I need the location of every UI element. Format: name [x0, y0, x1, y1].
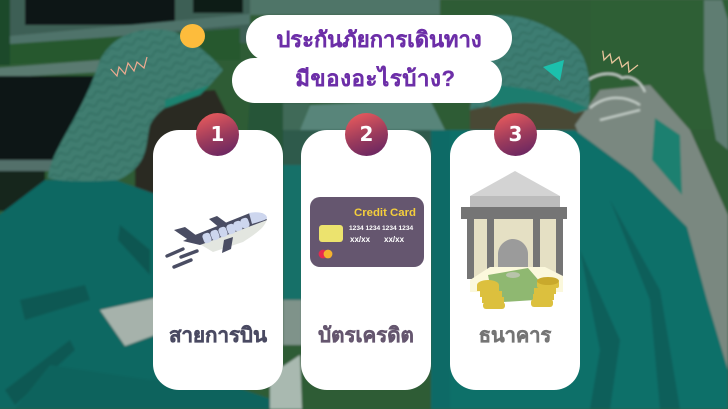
decoration: yellow dot — [180, 24, 205, 48]
title line 2: มีของอะไรบ้าง? — [295, 66, 456, 91]
card numbers: 1234 1234 1234 1234 — [349, 225, 413, 232]
card expiry right: xx/xx — [384, 235, 404, 244]
card title: Credit Card — [354, 207, 416, 219]
number badge 1: 1 — [211, 122, 224, 146]
panel: credit card — [301, 130, 431, 390]
number badge 2 — [345, 113, 388, 156]
number badge 1 — [196, 113, 239, 156]
number badge 3 — [494, 113, 537, 156]
decoration: teal triangle — [543, 60, 564, 81]
icon: bank with money — [461, 171, 567, 309]
title line 1: ประกันภัยการเดินทาง — [276, 27, 482, 52]
icon: credit card — [310, 197, 424, 267]
number badge 2: 2 — [360, 122, 373, 146]
label: airline: สายการบิน — [169, 324, 267, 347]
title line 2 — [232, 58, 502, 103]
panel: airline — [153, 130, 283, 390]
decoration: right zigzag — [602, 50, 638, 74]
card chip — [319, 225, 343, 242]
number badge 3: 3 — [509, 122, 522, 146]
title — [232, 15, 512, 103]
title line 1 — [246, 15, 512, 61]
label: bank: ธนาคาร — [479, 325, 551, 347]
card logo — [318, 250, 332, 258]
card expiry left: xx/xx — [350, 235, 370, 244]
panel: bank — [450, 130, 580, 390]
label: credit card: บัตรเครดิต — [318, 324, 414, 347]
icon: airplane — [165, 212, 267, 269]
decoration: left zigzag — [110, 56, 148, 78]
